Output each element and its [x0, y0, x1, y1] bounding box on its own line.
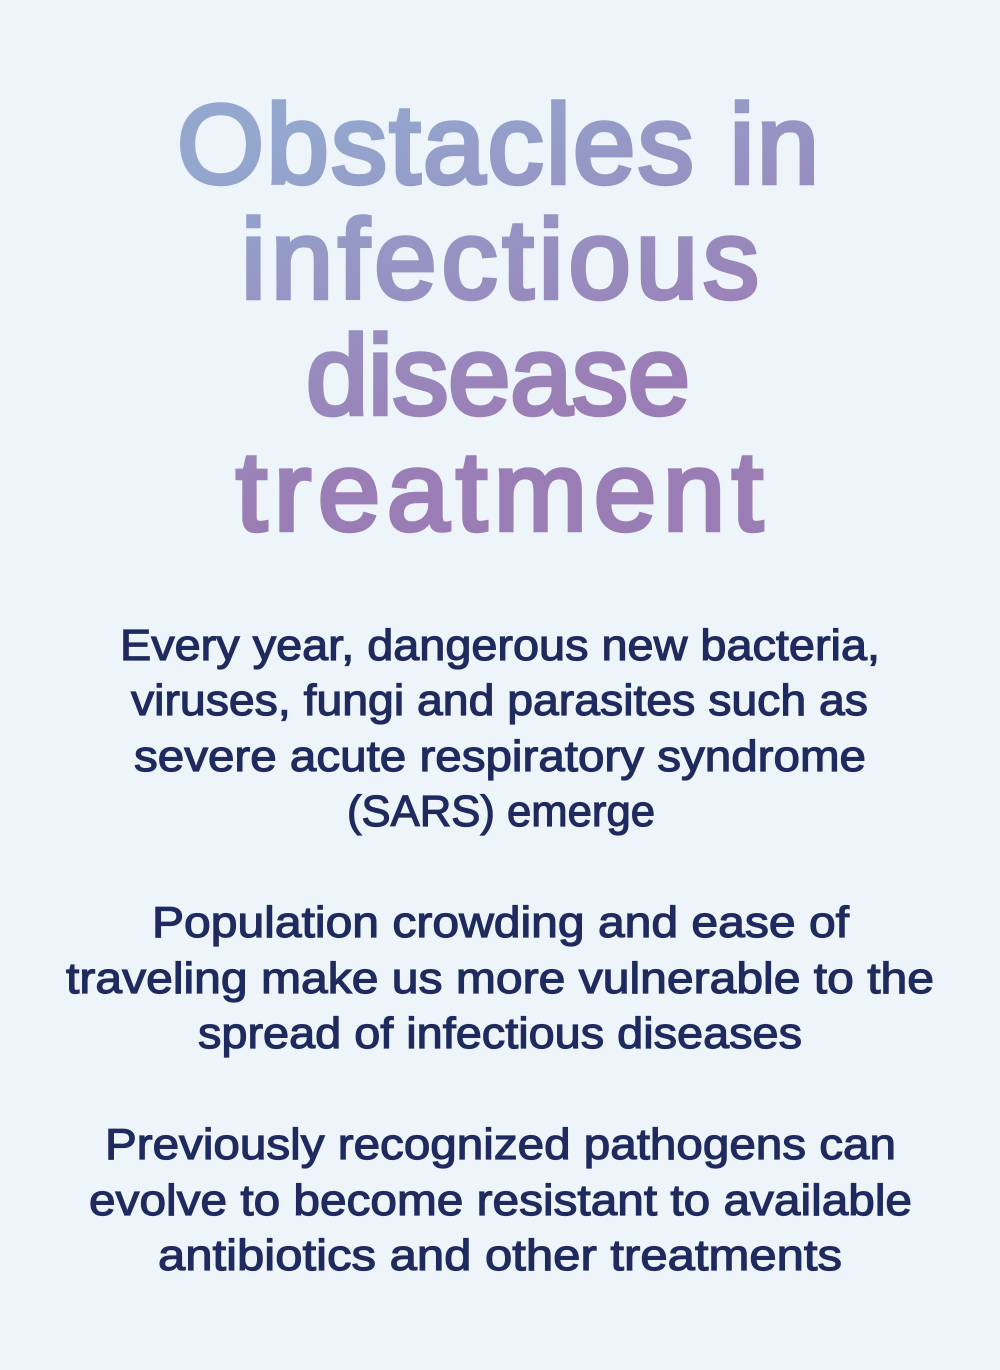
title: infectious [241, 197, 759, 322]
text block: resistance [89, 1120, 912, 1280]
text block: emerging pathogens: Every year, dangerous new bacteria, [120, 621, 880, 670]
text block: emerging pathogens [120, 621, 880, 836]
text block: crowding and travel: Population crowding and ease of [152, 898, 850, 947]
text block: crowding and travel [66, 898, 934, 1058]
text block: crowding and travel: spread of infectious diseases [198, 1009, 802, 1058]
text block: resistance: Previously recognized pathogens can [105, 1120, 896, 1169]
title: treatment [236, 429, 763, 554]
text block: resistance: evolve to become resistant to available [89, 1176, 912, 1225]
text block: crowding and travel: traveling make us more vulnerable to the [66, 954, 934, 1003]
title: Obstacles in [177, 82, 819, 207]
text block: emerging pathogens: (SARS) emerge [347, 787, 655, 836]
text block: resistance: antibiotics and other treatments [158, 1231, 842, 1280]
text block: emerging pathogens: severe acute respiratory syndrome [134, 732, 866, 781]
text block: emerging pathogens: viruses, fungi and parasites such as [131, 676, 868, 725]
title: disease [306, 313, 690, 438]
title [177, 82, 819, 554]
